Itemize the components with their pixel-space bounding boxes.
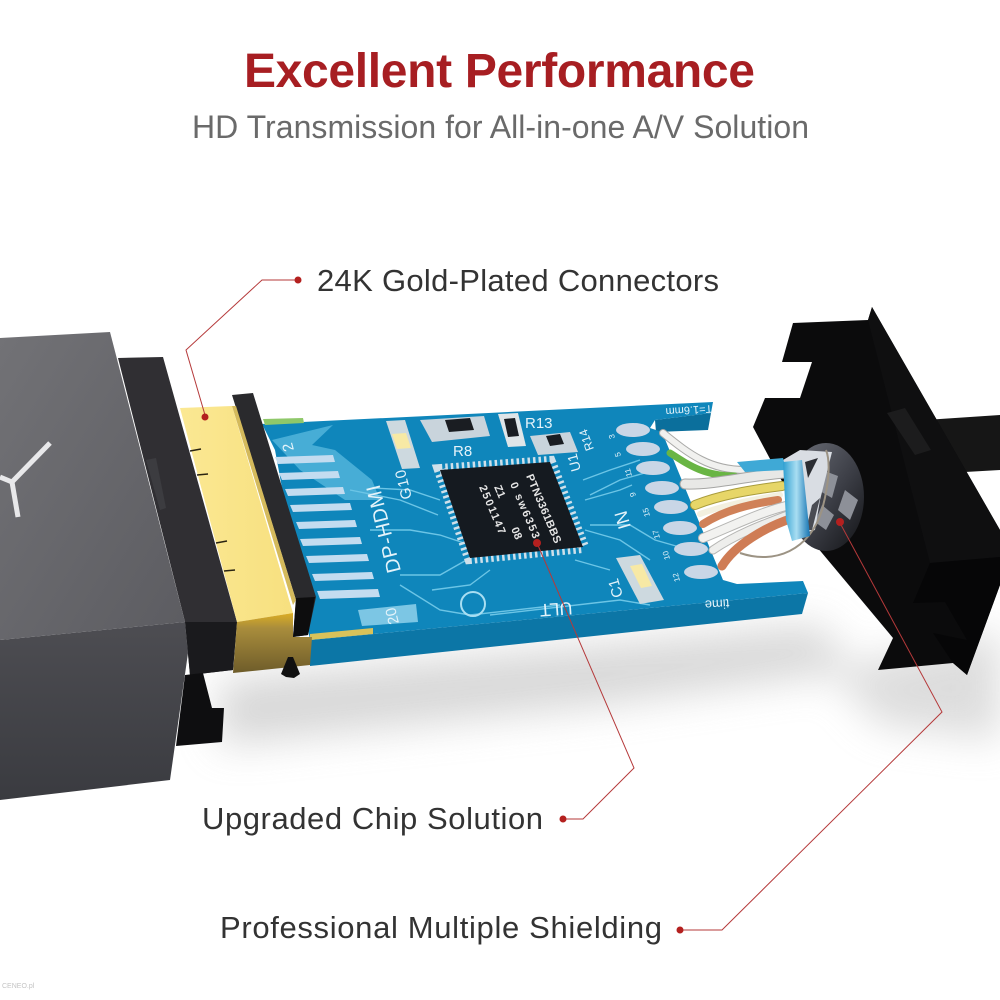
subtitle: HD Transmission for All-in-one A/V Solution	[192, 109, 809, 145]
label: Professional Multiple Shielding	[220, 910, 662, 945]
light blue contact zone	[272, 425, 380, 500]
chip pins	[440, 462, 583, 558]
board top face	[262, 402, 808, 640]
end dots	[533, 539, 566, 822]
callout: chip	[202, 539, 634, 836]
board silk-screen labels: 12	[671, 571, 682, 583]
chip body	[440, 462, 583, 558]
board silk-screen labels: C1	[605, 576, 627, 600]
circuit traces	[350, 460, 690, 615]
board silk-screen labels	[279, 402, 730, 626]
blue inner ferrule	[737, 458, 786, 472]
gold contact slots	[190, 449, 235, 571]
edge contacts	[275, 455, 380, 599]
housing top face	[0, 332, 185, 640]
gold shell top	[180, 406, 293, 622]
board silk-screen labels: 11	[623, 467, 634, 478]
board silk-screen labels: 2	[279, 441, 298, 453]
board silk-screen labels: DP-HDMI	[363, 482, 406, 575]
watermark: CENEO.pl	[2, 983, 35, 990]
board clip	[281, 657, 300, 678]
chip markings: 08	[508, 525, 524, 541]
black contact strip	[232, 393, 316, 637]
label: 24K Gold-Plated Connectors	[317, 263, 719, 298]
board silk-screen labels: G10	[392, 468, 416, 501]
chip markings: 2501147	[476, 483, 508, 536]
board silk-screen labels: R13	[525, 415, 553, 432]
chip markings: PTN3361BBS	[523, 472, 563, 545]
board side edge	[310, 593, 808, 666]
gold shell front	[233, 613, 312, 673]
braid diamonds	[815, 470, 858, 530]
end dots	[676, 518, 844, 934]
board silk-screen labels: 20	[382, 606, 403, 626]
leader line	[537, 543, 634, 819]
board silk-screen labels: T=1.6mm	[665, 402, 713, 417]
board silk-screen labels: 15	[641, 506, 652, 518]
callout: shielding	[220, 518, 942, 945]
board silk-screen labels: R8	[453, 443, 472, 460]
label: Upgraded Chip Solution	[202, 801, 543, 836]
drain wire loop	[740, 450, 829, 557]
chip markings: 0 sw6353	[507, 480, 542, 540]
icon: brand logo	[0, 443, 50, 517]
silver foil	[783, 450, 832, 536]
board silk-screen labels: IN	[611, 509, 635, 531]
surface mount components	[386, 413, 664, 604]
callout: gold-plated connectors	[186, 263, 719, 420]
board silk-screen labels: 5	[613, 451, 623, 458]
chip markings: Z1	[491, 483, 507, 500]
board silk-screen labels: U1	[564, 452, 584, 473]
solder pads	[616, 423, 718, 579]
title: Excellent Performance	[244, 45, 755, 98]
stripped wires and shield	[663, 433, 864, 566]
cable	[925, 415, 1000, 472]
black strain-relief connector	[753, 307, 1000, 675]
end dots	[202, 276, 302, 420]
ground shadow	[220, 625, 1000, 745]
test circle	[461, 592, 485, 616]
board silk-screen labels: 10	[661, 549, 672, 561]
shield braid	[788, 443, 864, 551]
chip markings	[476, 472, 563, 545]
black inner shell	[118, 357, 237, 675]
leader line	[186, 280, 298, 415]
grey housing with logo	[0, 332, 316, 800]
board silk-screen labels: 9	[628, 491, 638, 498]
board silk-screen labels: time	[704, 596, 730, 613]
top green edge	[263, 418, 304, 425]
board silk-screen labels: 3	[607, 433, 617, 440]
lower clip	[176, 673, 224, 746]
board silk-screen labels: 17	[651, 528, 662, 540]
board silk-screen labels: ULT	[539, 598, 573, 620]
board silk-screen labels: R14	[576, 427, 597, 453]
pad 20	[358, 604, 418, 626]
housing front face	[0, 622, 188, 800]
bottom gold pin	[310, 628, 373, 640]
leader line	[680, 523, 942, 930]
printed circuit board	[262, 402, 808, 666]
wires	[663, 433, 793, 566]
